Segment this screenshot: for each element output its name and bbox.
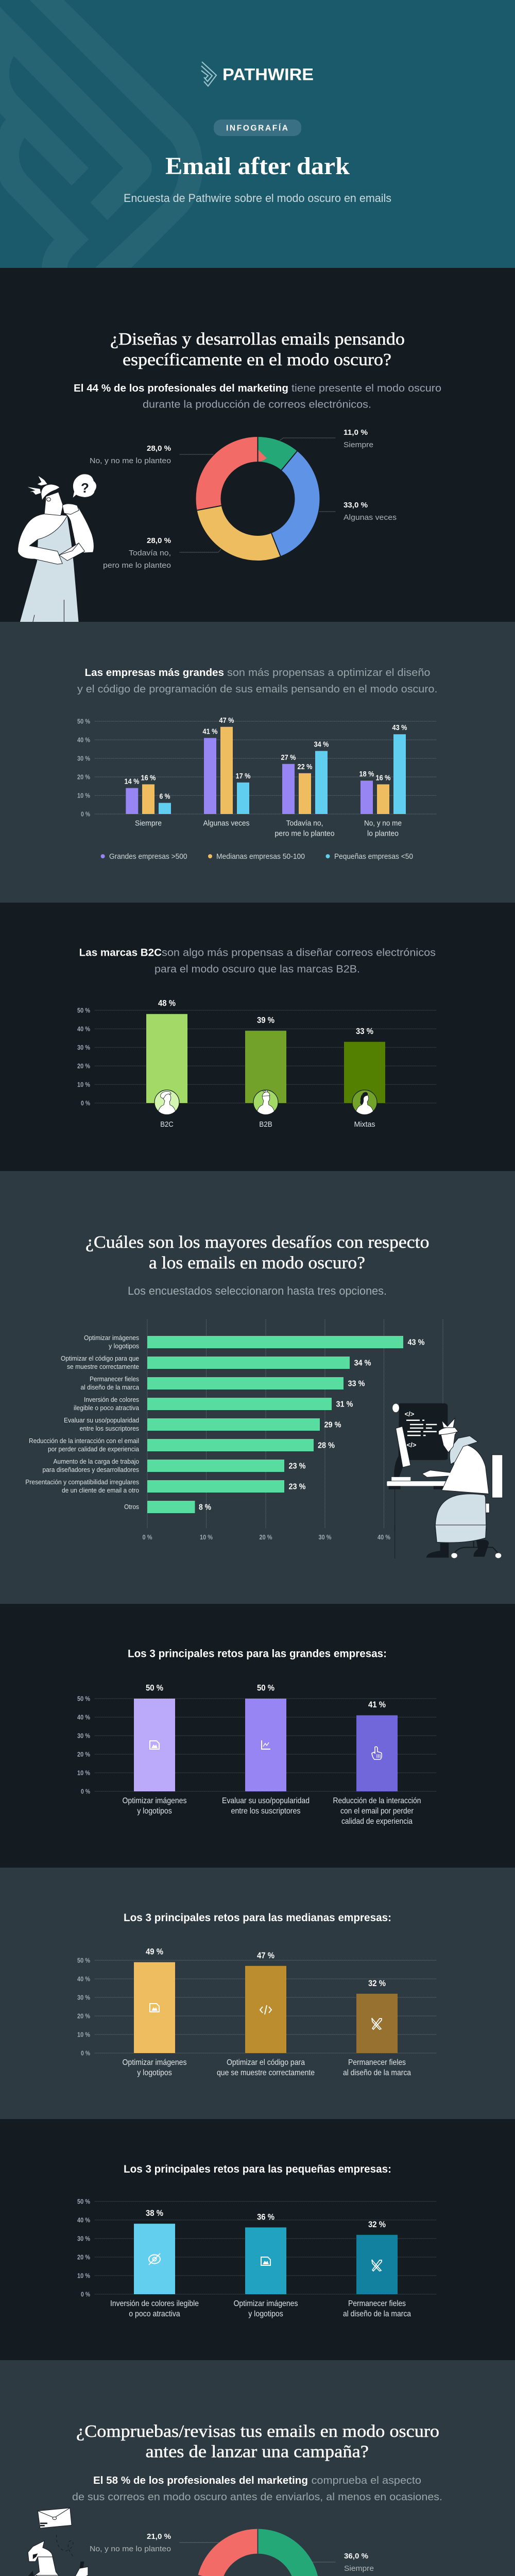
intro text: de sus correos en modo oscuro antes de enviarlos, al menos en ocasiones. [72,2492,442,2503]
donut label: no [90,2532,218,2553]
bar chart: 30 % [77,1044,90,1051]
donut chart [198,2529,307,2576]
horizontal bar chart: 33 % [348,1380,365,1388]
bar chart: Optimizar imágenes [123,2058,186,2067]
portrait: B2C [154,1090,179,1115]
bar chart: 30 % [77,1732,90,1739]
horizontal bar chart: 31 % [336,1400,353,1409]
horizontal bar chart: Optimizar el código para que [61,1354,139,1362]
heading: a los emails en modo oscuro? [149,1253,365,1273]
bar chart: 50 % [77,1695,90,1702]
horizontal bar chart: 10 % [200,1533,213,1541]
grouped bar chart: 18 % [359,770,374,778]
subtitle: Encuesta de Pathwire sobre el modo oscuro en emails [124,192,391,205]
logo: Pathwire [201,62,314,86]
panel: mayores desafíos [0,1171,515,1604]
bar chart: 40 % [77,2216,90,2224]
horizontal bar chart: 34 % [354,1359,371,1367]
panel: comprobación de emails [0,2360,515,2576]
intro text: para el modo oscuro que las marcas B2B. [154,964,360,975]
grouped bar chart: 10 % [77,791,90,800]
icon: code [260,2005,271,2014]
bar chart: 48 % [158,998,176,1008]
donut label: no: No, y no me lo planteo [90,456,171,465]
heading: ¿Cuáles son los mayores desafíos con respecto [85,1233,430,1252]
horizontal bar chart: Presentación y compatibilidad irregulares [25,1478,139,1486]
donut label: siempre [280,428,373,449]
heading [85,1233,430,1273]
intro text: comprueba el aspecto [312,2475,421,2486]
bar chart: 40 % [77,1714,90,1721]
bar chart: 50 % [77,1007,90,1014]
bar chart: 10 % [77,1081,90,1088]
bar chart [77,2198,437,2318]
icon: crossed eye [149,2253,160,2265]
bar chart: calidad de experiencia [341,1817,413,1826]
grouped bar chart: 50 % [77,717,90,725]
donut chart [197,437,307,556]
illustration: Hermes thinking: ? [81,480,89,496]
bar chart: B2C [160,1120,174,1129]
icon: pencil and brush [372,2018,382,2029]
grouped bar chart: Algunas veces [203,819,249,828]
bar chart: y logotipos [137,1807,172,1816]
intro text: El 44 % de los profesionales del marketing [74,383,288,394]
bar chart: con el email por perder [340,1807,414,1816]
heading: ¿Diseñas y desarrollas emails pensando [110,330,405,349]
legend [101,852,413,861]
donut label: algunas veces: 33,0 % [344,501,368,510]
horizontal bar chart: ilegible o poco atractiva [74,1404,140,1412]
horizontal bar chart: Inversión de colores [84,1396,139,1403]
intro text: Las marcas B2C [79,947,162,959]
horizontal bar chart: entre los suscriptores [79,1425,139,1432]
bar chart: 40 % [77,1025,90,1032]
grouped bar chart: 41 % [203,727,217,736]
portrait: mixtas [352,1090,377,1115]
illustration: Hermes thinking [18,474,96,622]
horizontal bar chart: por perder calidad de experiencia [48,1445,140,1453]
bar chart: Optimizar imágenes [123,1797,186,1805]
donut label: no: 28,0 % [147,444,171,453]
bar chart: Evaluar su uso/popularidad [222,1797,310,1805]
icon: image file [261,2257,270,2265]
bar chart: entre los suscriptores [231,1807,301,1816]
bar chart: 10 % [77,2031,90,2038]
illustration: Hermes programming [387,1403,503,1558]
horizontal bar chart: 23 % [288,1462,306,1470]
illustration: Minerva with phone and envelope [13,2508,88,2576]
bar chart [77,998,437,1129]
intro text [72,2475,442,2503]
bar chart: 33 % [356,1026,373,1036]
bar chart: o poco atractiva [129,2310,180,2318]
horizontal bar chart: 20 % [260,1533,272,1541]
grouped bar chart: 30 % [77,754,90,762]
donut label: todavía no [103,536,221,570]
horizontal bar chart: Permanecer fieles [90,1375,139,1383]
bar chart: al diseño de la marca [343,2310,411,2318]
heading: antes de lanzar una campaña? [145,2443,369,2462]
bar chart [77,1947,437,2077]
panel: empresas más grandes [0,622,515,903]
grouped bar chart: 43 % [392,723,407,732]
horizontal bar chart: para diseñadores y desarrolladores [42,1466,139,1473]
bar chart: 47 % [257,1951,274,1960]
grouped bar chart [77,716,437,838]
bar chart: y logotipos [248,2310,283,2318]
grouped bar chart: 16 % [376,773,390,782]
bar chart [77,1683,437,1826]
bar chart: 10 % [77,1769,90,1776]
heading: Los 3 principales retos para las pequeñas empresas: [124,2163,391,2175]
bar chart: Inversión de colores ilegible [110,2299,199,2308]
intro text [79,947,436,975]
panel: retos pequeñas empresas [0,2119,515,2360]
heading: ¿Compruebas/revisas tus emails en modo oscuro [76,2422,439,2441]
horizontal bar chart: 40 % [377,1533,390,1541]
bar chart: 20 % [77,2253,90,2261]
intro text: durante la producción de correos electrónicos. [143,399,371,410]
grouped bar chart: 40 % [77,736,90,744]
intro text: tiene presente el modo oscuro [291,383,441,394]
bar chart: 0 % [81,2049,90,2057]
panel: marcas B2C [77,948,436,1127]
grouped bar chart: 34 % [314,740,329,749]
panel: retos medianas empresas [0,1868,515,2119]
horizontal bar chart: al diseño de la marca [80,1383,140,1391]
bar chart: 20 % [77,1751,90,1758]
icon: line chart [262,1740,270,1749]
grouped bar chart: Todavía no, [286,819,323,828]
bar chart: Optimizar imágenes [234,2299,298,2308]
badge: infografía: INFOGRAFÍA [226,124,288,133]
legend: Pequeñas empresas <50 [334,852,413,861]
horizontal bar chart: 43 % [408,1338,424,1347]
bar chart: 32 % [368,2219,386,2229]
intro text: El 58 % de los profesionales del marketing [93,2475,308,2486]
bar chart: 36 % [257,2212,274,2222]
horizontal bar chart: Optimizar imágenes [84,1334,139,1342]
grouped bar chart: 17 % [236,772,250,781]
panel: retos grandes empresas [0,1604,515,1868]
horizontal bar chart: de un cliente de email a otro [62,1486,139,1494]
bar chart: 49 % [146,1947,163,1957]
heading: Los 3 principales retos para las grandes empresas: [128,1648,387,1660]
subheading: Los encuestados seleccionaron hasta tres opciones. [128,1284,387,1297]
horizontal bar chart: 8 % [199,1503,211,1512]
intro text [74,383,441,410]
intro text: Las empresas más grandes [84,667,224,679]
icon: pointing hand [372,1747,382,1759]
bar chart: que se muestre correctamente [217,2069,315,2077]
intro text: son más propensas a optimizar el diseño [227,667,431,679]
horizontal bar chart: 28 % [318,1442,335,1450]
bar chart: 50 % [77,2198,90,2205]
grouped bar chart: 6 % [160,792,170,801]
title: Email after dark [165,152,350,180]
horizontal bar chart: y logotipos [109,1342,139,1350]
illustration: Hermes programming: </> [405,1410,415,1418]
logo: Pathwire: PATHWIRE [222,65,314,83]
bar chart: 0 % [81,2291,90,2298]
icon: image file [150,2004,159,2012]
legend: Medianas empresas 50-100 [216,852,305,861]
donut label: todavía no: 28,0 % [147,536,171,545]
heading [110,330,405,369]
icon: pencil and brush [372,2260,382,2271]
bar chart: 39 % [257,1015,274,1025]
legend: Grandes empresas >500 [109,852,187,861]
grouped bar chart: No, y no me [364,819,402,828]
donut label: no [90,444,214,465]
bar chart: 20 % [77,1062,90,1070]
bar chart: Permanecer fieles [348,2299,406,2308]
bar chart: 32 % [368,1978,386,1988]
grouped bar chart: 20 % [77,773,90,781]
bar chart: 30 % [77,2235,90,2242]
horizontal bar chart: Aumento de la carga de trabajo [54,1458,139,1465]
horizontal bar chart: 0 % [142,1533,152,1541]
bar chart: 50 % [77,1957,90,1964]
donut label: siempre: Siempre [344,2564,374,2573]
donut label: algunas veces [319,501,397,522]
grouped bar chart: 47 % [219,716,234,725]
donut label: todavía no: pero me lo planteo [103,561,171,570]
bar chart: Optimizar el código para [227,2058,305,2067]
bar chart: 30 % [77,1994,90,2001]
horizontal bar chart: 29 % [324,1421,341,1429]
horizontal bar chart: 23 % [288,1483,306,1491]
horizontal bar chart: Reducción de la interacción con el email [29,1437,139,1445]
horizontal bar chart: se muestre correctamente [67,1363,139,1370]
grouped bar chart: pero me lo planteo [275,829,335,838]
donut label: todavía no: Todavía no, [129,549,171,557]
grouped bar chart: 22 % [298,762,312,771]
horizontal bar chart: Evaluar su uso/popularidad [64,1416,139,1424]
bar chart: 0 % [81,1099,90,1107]
donut label: siempre: Siempre [344,440,373,449]
bar chart: al diseño de la marca [343,2069,411,2077]
bar chart: Mixtas [354,1120,375,1129]
bar chart: 0 % [81,1788,90,1795]
grouped bar chart: Siempre [135,819,162,828]
intro text: son algo más propensas a diseñar correos electrónicos [162,947,436,959]
grouped bar chart: 14 % [125,777,139,786]
donut label: algunas veces: Algunas veces [344,513,397,522]
bar chart: 38 % [146,2208,163,2218]
bar chart: Reducción de la interacción [333,1797,421,1805]
intro text [77,667,438,695]
bar chart: y logotipos [137,2069,172,2077]
bar chart: 20 % [77,2012,90,2020]
donut label: no: 21,0 % [147,2532,171,2541]
grouped bar chart: 27 % [281,753,296,762]
horizontal bar chart [25,1319,443,1541]
horizontal bar chart: 30 % [318,1533,332,1541]
portrait: B2B [253,1089,278,1115]
heading: específicamente en el modo oscuro? [123,350,391,369]
bar chart: 41 % [368,1700,386,1709]
bar chart: B2B [259,1120,272,1129]
panel: diseño para modo oscuro [0,268,515,622]
grouped bar chart: lo planteo [367,829,399,838]
badge: infografía [214,120,301,136]
heading: Los 3 principales retos para las medianas empresas: [124,1912,391,1924]
donut label: siempre [312,2552,374,2573]
bar chart: 40 % [77,1975,90,1982]
bar chart: 10 % [77,2272,90,2279]
bar chart: 50 % [146,1683,163,1693]
intro text: y el código de programación de sus emails pensando en el modo oscuro. [77,684,438,695]
donut label: siempre: 11,0 % [344,428,368,437]
icon: image file [150,1741,159,1749]
illustration: Hermes programming: </> [407,1441,417,1449]
donut label: no: No, y no me lo planteo [90,2545,171,2553]
heading [76,2422,439,2462]
grouped bar chart: 16 % [141,773,156,782]
grouped bar chart: 0 % [81,810,90,818]
panel: hero header [0,0,515,268]
horizontal bar chart: Otros [124,1503,139,1511]
donut label: siempre: 36,0 % [344,2552,368,2561]
bar chart: Permanecer fieles [348,2058,406,2067]
bar chart: 50 % [257,1683,274,1693]
background wing pattern [0,0,203,268]
